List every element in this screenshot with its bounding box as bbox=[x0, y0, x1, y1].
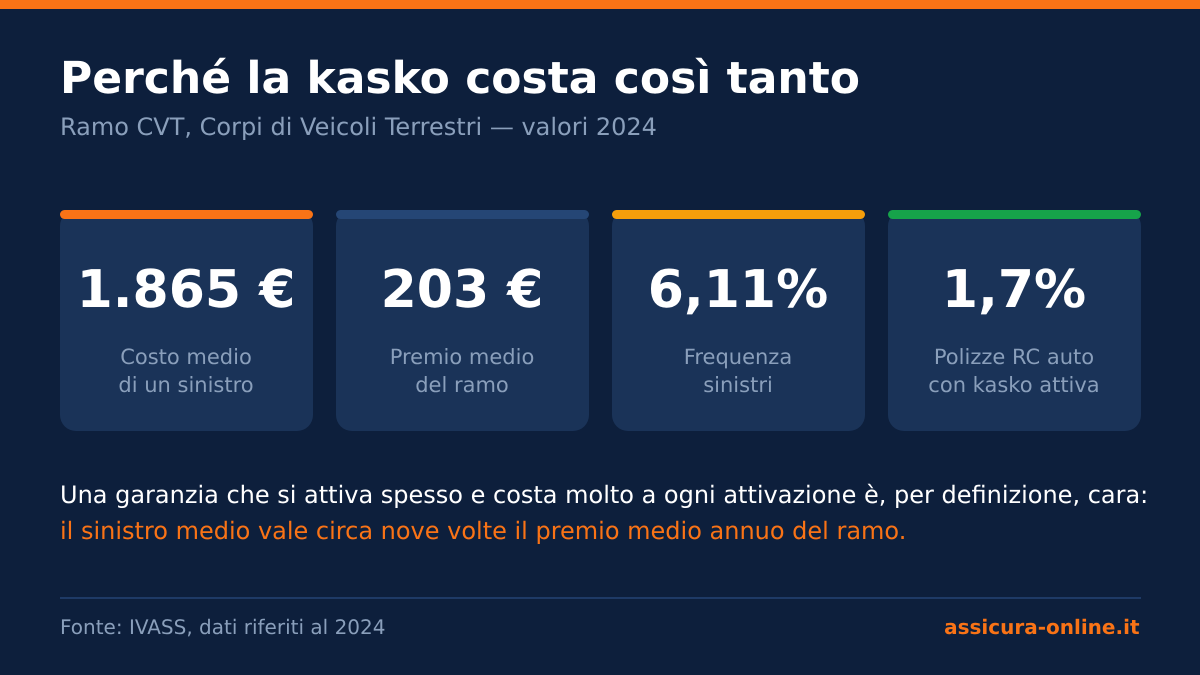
text block: conclusion: il sinistro medio vale circa nove volte il premio medio annuo del ramo. bbox=[60, 517, 906, 545]
panel: costo medio sinistro: Costo medio bbox=[120, 345, 252, 369]
source note: Fonte: IVASS, dati riferiti al 2024 bbox=[60, 615, 385, 639]
panel: costo medio sinistro bbox=[60, 210, 313, 431]
panel: frequenza sinistri bbox=[612, 210, 865, 431]
panel: frequenza sinistri: sinistri bbox=[703, 373, 773, 397]
panel: polizze con kasko: Polizze RC auto bbox=[934, 345, 1094, 369]
panel: frequenza sinistri: 6,11% bbox=[648, 260, 828, 320]
panel: premio medio: del ramo bbox=[415, 373, 509, 397]
top accent bar bbox=[0, 0, 1200, 9]
panel: premio medio bbox=[336, 210, 589, 431]
title: Perché la kasko costa così tanto bbox=[60, 53, 860, 104]
panel: frequenza sinistri: Frequenza bbox=[684, 345, 792, 369]
panel: costo medio sinistro: di un sinistro bbox=[118, 373, 254, 397]
brand: assicura-online.it bbox=[944, 615, 1140, 639]
panel: polizze con kasko: 1,7% bbox=[942, 260, 1086, 320]
panel: polizze con kasko bbox=[888, 210, 1141, 431]
panel: costo medio sinistro: 1.865 € bbox=[77, 260, 295, 320]
subtitle: Ramo CVT, Corpi di Veicoli Terrestri — valori 2024 bbox=[60, 113, 657, 141]
panel: premio medio: Premio medio bbox=[390, 345, 534, 369]
text block: conclusion bbox=[60, 481, 1148, 545]
panel: polizze con kasko: con kasko attiva bbox=[928, 373, 1100, 397]
text block: conclusion: Una garanzia che si attiva spesso e costa molto a ogni attivazione è, per definizione, cara: bbox=[60, 481, 1148, 509]
panel: premio medio: 203 € bbox=[381, 260, 543, 320]
